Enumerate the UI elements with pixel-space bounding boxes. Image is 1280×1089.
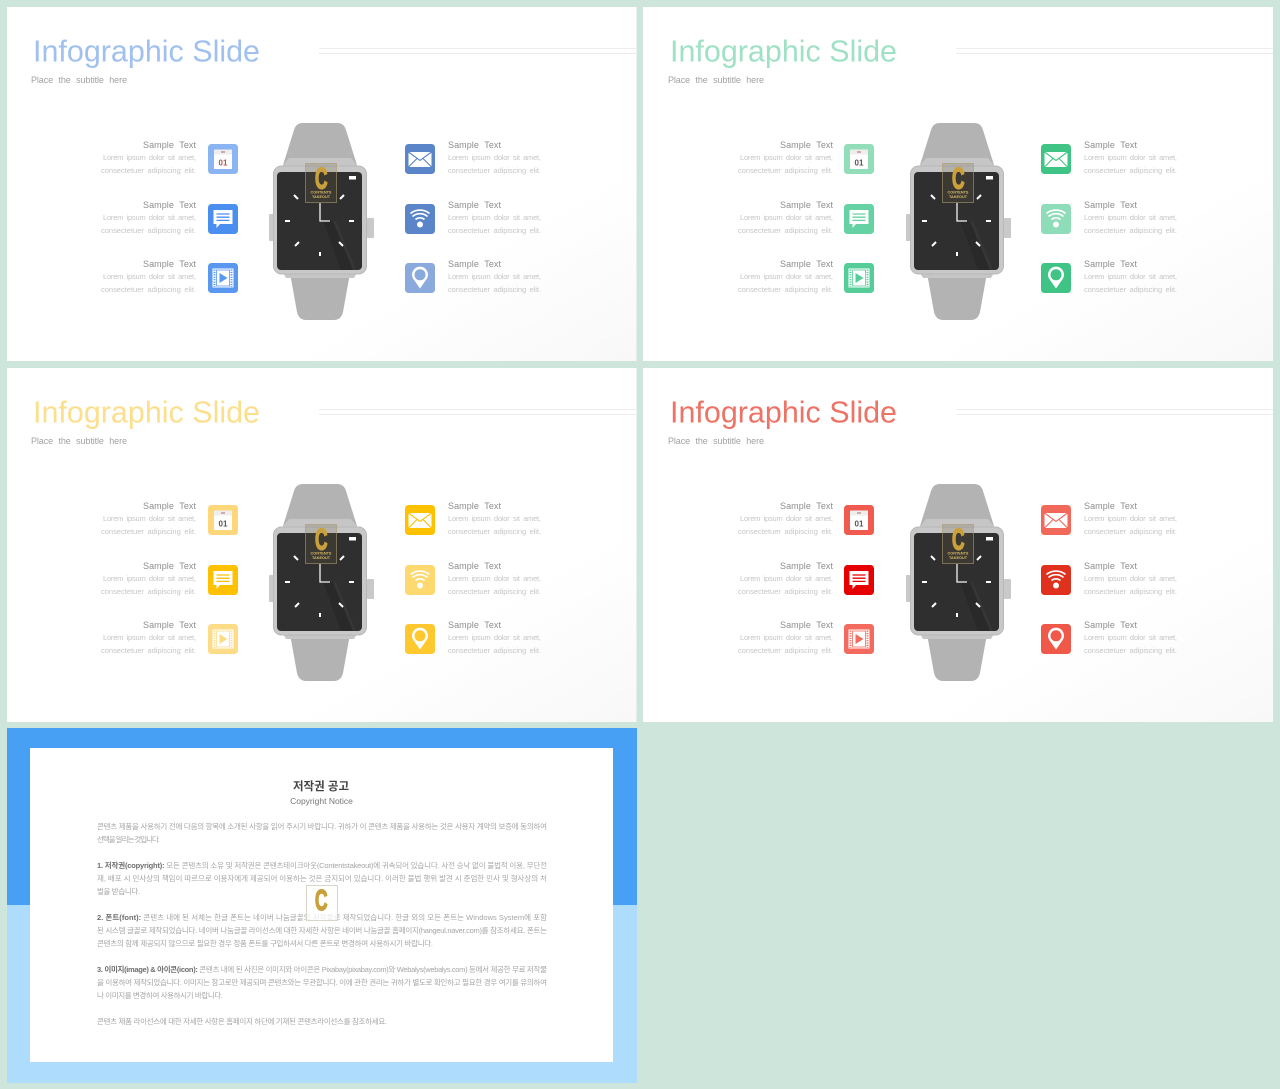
item: chat left middle	[738, 561, 874, 596]
item: video left bottom: Sample Text	[780, 259, 833, 269]
watermark logo: TAKEOUT	[949, 556, 968, 560]
subtitle: Place the subtitle here	[31, 75, 127, 85]
item: video left bottom: consectetuer adipiscing elit.	[738, 285, 833, 294]
item: wifi right middle: Sample Text	[1084, 561, 1137, 571]
item: wifi right middle	[1041, 561, 1177, 596]
item: video left bottom: Lorem ipsum dolor sit amet,	[740, 272, 833, 281]
item: chat left middle: Lorem ipsum dolor sit amet,	[740, 213, 833, 222]
watermark logo: TAKEOUT	[312, 195, 331, 199]
watermark logo: C	[952, 163, 964, 196]
item: video left bottom	[101, 259, 238, 294]
watermark logo	[306, 886, 338, 920]
watermark logo: TAKEOUT	[949, 195, 968, 199]
section 2 font: 된 시스템 글꼴로 제작되었습니다. 네이버 나눔글꼴 라이선스에 대한 자세한 사항은 네이버 나눔글꼴 홈페이지(hangeul.naver.com)를 참조하세요. 폰트는	[97, 925, 547, 935]
item: calendar left top	[738, 501, 874, 536]
item: mail right top	[1041, 501, 1177, 536]
item: wifi right middle	[405, 200, 541, 235]
section 1 copyright	[97, 860, 547, 896]
section 3 image and icon	[97, 964, 547, 1000]
item: chat left middle: Sample Text	[143, 561, 196, 571]
item: chat left middle: Lorem ipsum dolor sit amet,	[103, 213, 196, 222]
panel: yellow slide	[7, 368, 636, 722]
blue top band	[7, 728, 637, 905]
item: chat left middle: Lorem ipsum dolor sit amet,	[103, 574, 196, 583]
watermark logo	[942, 524, 974, 564]
item: mail right top: consectetuer adipiscing elit.	[1084, 527, 1177, 536]
item: chat left middle: consectetuer adipiscing elit.	[738, 587, 833, 596]
item: calendar left top: 01	[855, 520, 864, 528]
item: chat left middle: Sample Text	[780, 200, 833, 210]
slide background	[643, 7, 1273, 361]
item: wifi right middle	[1041, 200, 1177, 235]
item: video left bottom: Lorem ipsum dolor sit amet,	[103, 272, 196, 281]
item: calendar left top: 01	[219, 520, 228, 528]
section 1 copyright: 재, 배포 시 민사상의 책임이 따르므로 이용자에게 제공되어 이용하는 것은 금지되어 있습니다. 이러한 불법 행위 발견 시 준엄한 민사 및 형사상의 처	[97, 873, 547, 883]
item: wifi right middle: Lorem ipsum dolor sit amet,	[448, 574, 541, 583]
watch illustration	[906, 123, 1011, 320]
item: mail right top: Sample Text	[1084, 140, 1137, 150]
item: mail right top: consectetuer adipiscing elit.	[448, 166, 541, 175]
item: video left bottom: consectetuer adipiscing elit.	[101, 646, 196, 655]
item: wifi right middle: Sample Text	[1084, 200, 1137, 210]
item: mail right top	[1041, 140, 1177, 175]
watermark logo: CONTENTS	[948, 552, 969, 556]
slide background	[7, 368, 636, 722]
item: video left bottom	[101, 620, 238, 655]
subtitle: Place the subtitle here	[668, 75, 764, 85]
item: wifi right middle: Lorem ipsum dolor sit amet,	[1084, 213, 1177, 222]
item: wifi right middle: Sample Text	[448, 561, 501, 571]
item: calendar left top: Lorem ipsum dolor sit amet,	[103, 514, 196, 523]
watermark logo	[306, 524, 336, 564]
item: video left bottom: consectetuer adipiscing elit.	[738, 646, 833, 655]
light blue bottom band	[7, 905, 637, 1083]
item: video left bottom	[738, 620, 874, 655]
item: mail right top	[405, 501, 541, 536]
item: pin right bottom	[1041, 259, 1177, 294]
item: pin right bottom	[405, 259, 541, 294]
watermark logo: CONTENTS	[311, 552, 332, 556]
watermark logo: CONTENTS	[948, 190, 969, 194]
item: chat left middle: consectetuer adipiscing elit.	[738, 226, 833, 235]
item: calendar left top: Lorem ipsum dolor sit amet,	[103, 153, 196, 162]
item: calendar left top	[101, 140, 238, 175]
section 3 image and icon: 을 이용하여 제작되었습니다. 이미지는 참고로만 제공되며 콘텐츠와는 무관합니다. 이에 관한 권리는 귀하가 별도로 확인하고 필요한 경우 여기를 유의하여	[97, 977, 547, 987]
title: Infographic Slide	[33, 396, 260, 430]
item: wifi right middle: consectetuer adipiscing elit.	[1084, 587, 1177, 596]
item: calendar left top: 01	[219, 158, 228, 168]
item: pin right bottom: Sample Text	[448, 620, 501, 630]
item: pin right bottom: consectetuer adipiscing elit.	[1084, 285, 1177, 294]
item: calendar left top	[101, 501, 238, 536]
watermark logo	[942, 163, 974, 202]
section 3 image and icon: 3. 이미지(image) & 아이콘(icon): 콘텐츠 내에 된 사진은 이미지와 아이콘은 Pixabay(pixabay.com)와 Webalys(webalys.com) 등에서 제공한 무료 저작물	[97, 964, 547, 974]
subtitle: Place the subtitle here	[668, 436, 764, 446]
item: pin right bottom: consectetuer adipiscing elit.	[1084, 646, 1177, 655]
item: chat left middle	[101, 200, 238, 235]
item: wifi right middle: consectetuer adipiscing elit.	[448, 226, 541, 235]
watermark logo: C	[952, 524, 964, 557]
item: chat left middle: consectetuer adipiscing elit.	[101, 587, 196, 596]
item: video left bottom	[738, 259, 874, 294]
item: mail right top: consectetuer adipiscing elit.	[1084, 166, 1177, 175]
intro paragraph	[97, 821, 547, 844]
title: Infographic Slide	[670, 396, 897, 430]
item: wifi right middle	[405, 561, 541, 596]
item: video left bottom: Lorem ipsum dolor sit amet,	[740, 633, 833, 642]
item: calendar left top: consectetuer adipiscing elit.	[101, 527, 196, 536]
watch illustration	[269, 484, 374, 681]
item: mail right top: Sample Text	[448, 140, 501, 150]
item: video left bottom: Sample Text	[780, 620, 833, 630]
section 1 copyright: 벌을 받습니다.	[97, 886, 140, 896]
item: calendar left top: Sample Text	[780, 140, 833, 150]
section 2 font: 콘텐츠의 함께 제공되지 않으므로 필요한 경우 정품 폰트를 구입하셔서 다른 폰트로 변경하여 사용하시기 바랍니다.	[97, 938, 433, 948]
item: calendar left top: consectetuer adipiscing elit.	[738, 527, 833, 536]
item: pin right bottom: consectetuer adipiscing elit.	[448, 646, 541, 655]
section 2 font: 2. 폰트(font): 콘텐츠 내에 된 서체는 한글 폰트는 네이버 나눔글꼴의 저작물로 제작되었습니다. 한글 외의 모든 폰트는 Windows System에 포함	[97, 912, 547, 922]
watch illustration	[906, 484, 1011, 681]
item: pin right bottom: Lorem ipsum dolor sit amet,	[448, 272, 541, 281]
item: pin right bottom	[1041, 620, 1177, 655]
item: calendar left top: consectetuer adipiscing elit.	[101, 166, 196, 175]
item: chat left middle	[101, 561, 238, 596]
item: video left bottom: Sample Text	[143, 259, 196, 269]
item: calendar left top: Sample Text	[780, 501, 833, 511]
section 2 font	[97, 912, 547, 948]
item: mail right top: Lorem ipsum dolor sit amet,	[1084, 514, 1177, 523]
white card	[30, 748, 613, 1062]
notice heading: 저작권 공고	[293, 779, 349, 793]
watch illustration	[269, 123, 374, 320]
item: calendar left top: 01	[855, 158, 864, 168]
item: mail right top: consectetuer adipiscing elit.	[448, 527, 541, 536]
item: video left bottom: consectetuer adipiscing elit.	[101, 285, 196, 294]
panel: red slide	[643, 368, 1273, 722]
item: pin right bottom: Sample Text	[1084, 259, 1137, 269]
item: wifi right middle: consectetuer adipiscing elit.	[448, 587, 541, 596]
item: calendar left top: Lorem ipsum dolor sit amet,	[740, 153, 833, 162]
item: mail right top: Lorem ipsum dolor sit amet,	[448, 153, 541, 162]
intro paragraph: 콘텐츠 제품을 사용하기 전에 다음의 항목에 소개된 사항을 읽어 주시기 바랍니다. 귀하가 이 콘텐츠 제품을 사용하는 것은 사용자 계약의 보증에 동의하여	[97, 821, 547, 831]
item: pin right bottom: Lorem ipsum dolor sit amet,	[448, 633, 541, 642]
item: mail right top: Lorem ipsum dolor sit amet,	[1084, 153, 1177, 162]
watermark logo	[306, 163, 336, 202]
item: chat left middle	[738, 200, 874, 235]
closing line: 콘텐츠 제품 라이선스에 대한 자세한 사항은 홈페이지 하단에 기재된 콘텐츠라이선스를 참조하세요.	[97, 1016, 387, 1026]
item: video left bottom: Lorem ipsum dolor sit amet,	[103, 633, 196, 642]
item: calendar left top: Sample Text	[143, 501, 196, 511]
item: calendar left top: consectetuer adipiscing elit.	[738, 166, 833, 175]
item: pin right bottom: Lorem ipsum dolor sit amet,	[1084, 272, 1177, 281]
title: Infographic Slide	[33, 34, 260, 68]
panel: green slide	[643, 7, 1273, 361]
watermark logo: C	[315, 886, 327, 917]
panel: copyright notice	[7, 728, 637, 1083]
item: chat left middle: Lorem ipsum dolor sit amet,	[740, 574, 833, 583]
slide background	[643, 368, 1273, 722]
item: calendar left top	[738, 140, 874, 175]
item: chat left middle: consectetuer adipiscing elit.	[101, 226, 196, 235]
watermark logo: C	[315, 524, 327, 557]
slide background	[7, 7, 636, 361]
item: pin right bottom: Lorem ipsum dolor sit amet,	[1084, 633, 1177, 642]
section 1 copyright: 1. 저작권(copyright): 모든 콘텐츠의 소유 및 저작권은 콘텐츠테이크아웃(Contentstakeout)에 귀속되어 있습니다. 사전 승낙 없이 불법적 이용, 무단전	[97, 860, 547, 870]
item: mail right top: Sample Text	[448, 501, 501, 511]
item: pin right bottom: Sample Text	[1084, 620, 1137, 630]
section 3 image and icon: 나 이미지를 변경하여 사용하시기 바랍니다.	[97, 990, 223, 1000]
item: mail right top: Lorem ipsum dolor sit amet,	[448, 514, 541, 523]
item: wifi right middle: Lorem ipsum dolor sit amet,	[1084, 574, 1177, 583]
watermark logo: TAKEOUT	[312, 556, 331, 560]
item: video left bottom: Sample Text	[143, 620, 196, 630]
notice subheading: Copyright Notice	[290, 796, 353, 806]
item: calendar left top: Lorem ipsum dolor sit amet,	[740, 514, 833, 523]
item: mail right top	[405, 140, 541, 175]
title: Infographic Slide	[670, 34, 897, 68]
subtitle: Place the subtitle here	[31, 436, 127, 446]
item: calendar left top: Sample Text	[143, 140, 196, 150]
watermark logo: C	[315, 163, 327, 196]
item: pin right bottom: Sample Text	[448, 259, 501, 269]
panel: blue slide	[7, 7, 636, 361]
intro paragraph: 선택을 알리는 것입니다.	[97, 834, 160, 844]
item: wifi right middle: Lorem ipsum dolor sit amet,	[448, 213, 541, 222]
item: chat left middle: Sample Text	[143, 200, 196, 210]
item: pin right bottom	[405, 620, 541, 655]
item: wifi right middle: Sample Text	[448, 200, 501, 210]
watermark logo: CONTENTS	[311, 190, 332, 194]
item: chat left middle: Sample Text	[780, 561, 833, 571]
item: pin right bottom: consectetuer adipiscing elit.	[448, 285, 541, 294]
item: wifi right middle: consectetuer adipiscing elit.	[1084, 226, 1177, 235]
item: mail right top: Sample Text	[1084, 501, 1137, 511]
